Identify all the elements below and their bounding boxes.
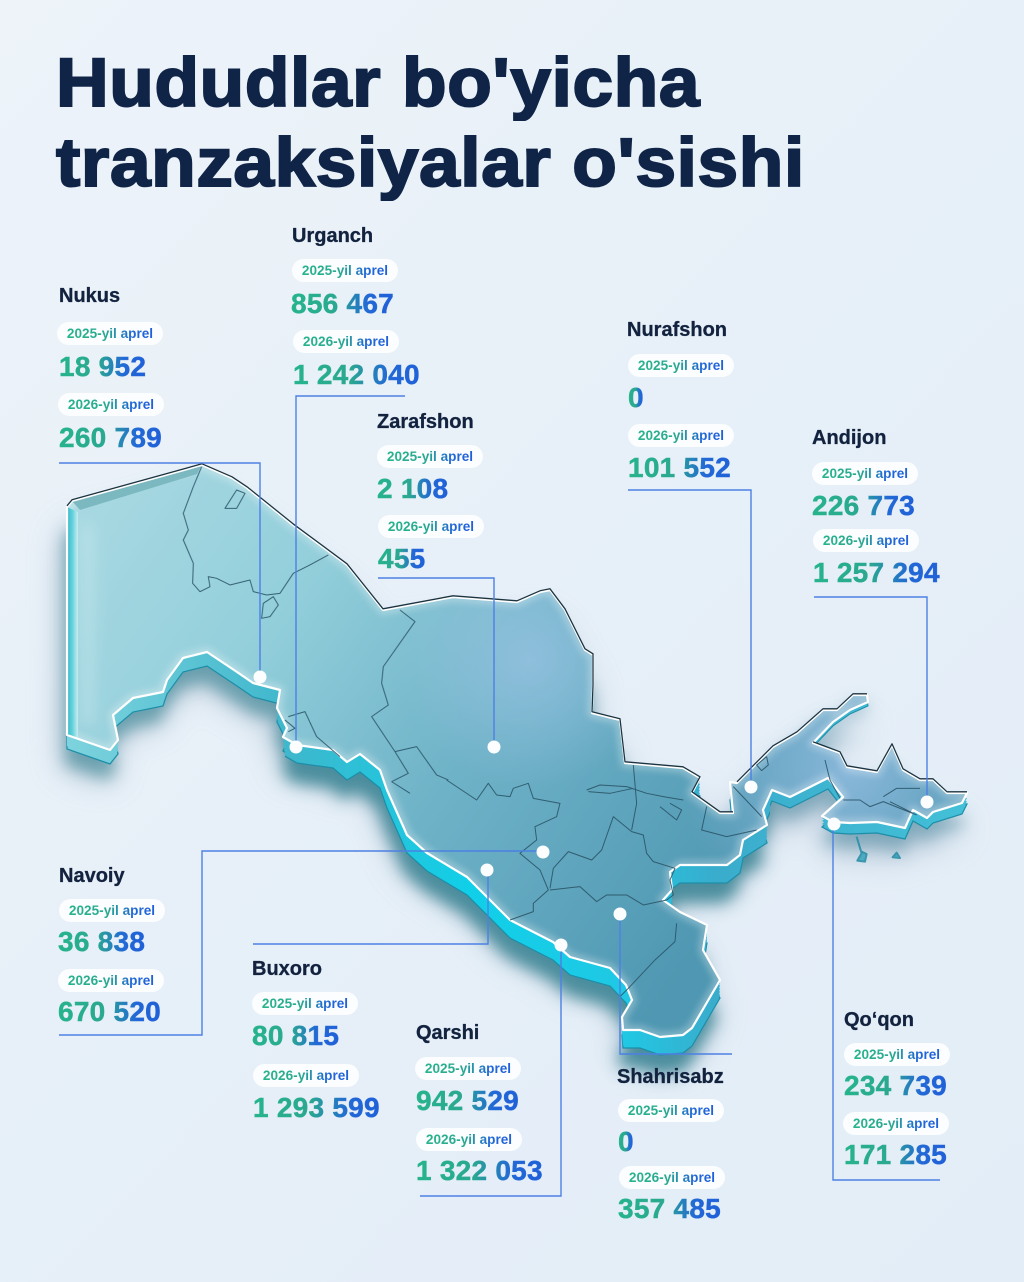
block: Andijon: Andijon — [812, 427, 886, 449]
block: Navoiy: 36 838 — [58, 926, 145, 957]
block: Nukus: 2026-yil aprel — [68, 397, 154, 412]
map of Uzbekistan — [46, 395, 974, 1197]
block: Andijon: 226 773 — [812, 490, 915, 521]
block: Navoiy: 2025-yil aprel — [69, 903, 155, 918]
map shadow — [63, 473, 967, 1075]
block: Shahrisabz: 357 485 — [618, 1193, 721, 1224]
block: Andijon: 1 257 294 — [813, 557, 940, 588]
block: Buxoro: 80 815 — [252, 1020, 339, 1051]
block: Zarafshon: 2025-yil aprel — [387, 449, 473, 464]
block: Qo'qon: 2026-yil aprel — [853, 1116, 939, 1131]
block: Zarafshon — [377, 411, 484, 574]
block: Nurafshon: 101 552 — [628, 452, 731, 483]
block: Qo'qon: Qo‘qon — [844, 1009, 914, 1031]
block: Buxoro — [252, 958, 380, 1123]
block: Urganch: 2025-yil aprel — [302, 263, 388, 278]
block: Nukus: Nukus — [59, 285, 120, 307]
block: Qo'qon: 234 739 — [844, 1070, 947, 1101]
block: Qo'qon — [843, 1009, 950, 1170]
block: Urganch: 1 242 040 — [293, 359, 420, 390]
block: Qo'qon: 2025-yil aprel — [854, 1047, 940, 1062]
block: Nurafshon — [627, 319, 840, 828]
block: Buxoro: 2025-yil aprel — [262, 996, 348, 1011]
block: Zarafshon: Zarafshon — [377, 411, 474, 433]
block: Navoiy: Navoiy — [59, 865, 125, 887]
block: Nurafshon: Nurafshon — [627, 319, 727, 341]
block: Nukus: 260 789 — [59, 422, 162, 453]
leader lines — [59, 396, 940, 1196]
block: Buxoro: 2026-yil aprel — [263, 1068, 349, 1083]
block: Buxoro: Buxoro — [252, 958, 322, 980]
block: Andijon: 2026-yil aprel — [823, 533, 909, 548]
glass rim: left and top — [67, 465, 202, 738]
block: Urganch — [291, 225, 420, 390]
block: Navoiy: 2026-yil aprel — [68, 973, 154, 988]
block: Nurafshon: 2025-yil aprel — [638, 358, 724, 373]
block: Zarafshon: 2 108 — [377, 473, 448, 504]
block: Qarshi — [415, 1022, 543, 1186]
title: Hududlar bo'yicha — [56, 44, 700, 121]
title — [56, 44, 805, 201]
block: Shahrisabz: 0 — [618, 1126, 634, 1157]
location dots — [254, 670, 934, 952]
block: Qarshi: 1 322 053 — [416, 1155, 543, 1186]
block: Zarafshon: 455 — [378, 543, 425, 574]
block: Nurafshon: 2026-yil aprel — [638, 428, 724, 443]
block: Nukus: 18 952 — [59, 351, 146, 382]
map extrusion — [66, 653, 968, 1056]
block: Andijon: 2025-yil aprel — [822, 466, 908, 481]
title: tranzaksiyalar o'sishi — [56, 124, 805, 201]
block: Urganch: 856 467 — [291, 288, 394, 319]
block: Qarshi: 2026-yil aprel — [426, 1132, 512, 1147]
block: Shahrisabz: Shahrisabz — [617, 1066, 724, 1088]
block: Qarshi: Qarshi — [416, 1022, 479, 1044]
block: Navoiy: 670 520 — [58, 996, 161, 1027]
block: Nukus: 2025-yil aprel — [67, 326, 153, 341]
block: Shahrisabz: 2026-yil aprel — [629, 1170, 715, 1185]
block: Shahrisabz: 2025-yil aprel — [628, 1103, 714, 1118]
block: Andijon — [812, 427, 940, 588]
block: Shahrisabz — [617, 1066, 725, 1224]
block: Qarshi: 942 529 — [416, 1085, 519, 1116]
block: Nukus — [57, 285, 164, 453]
block: Buxoro: 1 293 599 — [253, 1092, 380, 1123]
map surface — [67, 464, 967, 1037]
block: Urganch: Urganch — [292, 225, 373, 247]
block: Qo'qon: 171 285 — [844, 1139, 947, 1170]
block: Urganch: 2026-yil aprel — [303, 334, 389, 349]
block: Zarafshon: 2026-yil aprel — [388, 519, 474, 534]
block: Qarshi: 2025-yil aprel — [425, 1061, 511, 1076]
block: Nurafshon: 0 — [628, 382, 644, 413]
region borders — [183, 467, 920, 997]
block: Navoiy — [58, 865, 165, 1027]
